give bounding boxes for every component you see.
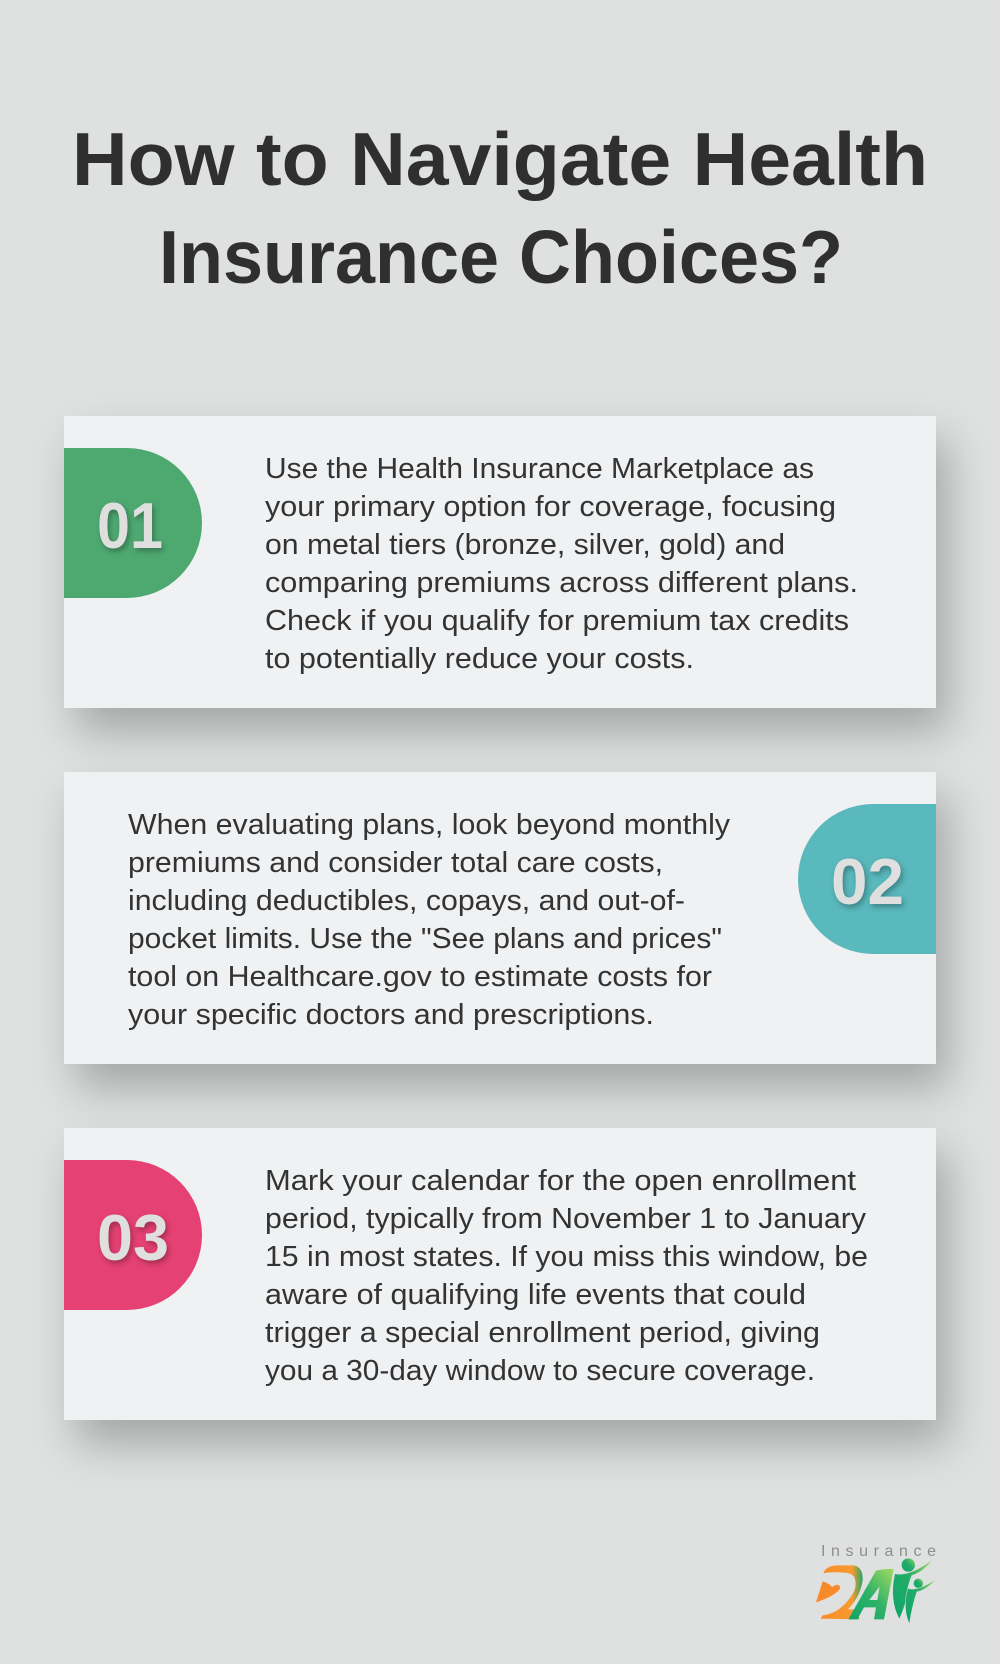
text block: marketplace advice: Use the Health Insurance Marketplace as bbox=[265, 453, 814, 485]
text block: open enrollment advice: Mark your calendar for the open enrollment bbox=[265, 1165, 856, 1197]
badge: 02: 02 bbox=[831, 845, 904, 918]
text block: marketplace advice: Check if you qualify for premium tax credits bbox=[265, 605, 849, 637]
text block: evaluating plans advice: your specific doctors and prescriptions. bbox=[128, 999, 654, 1031]
text block: evaluating plans advice bbox=[128, 809, 731, 1031]
card background 3 bbox=[64, 1128, 936, 1420]
text block: open enrollment advice: 15 in most states. If you miss this window, be bbox=[265, 1241, 868, 1273]
text block: evaluating plans advice: When evaluating plans, look beyond monthly bbox=[128, 809, 731, 841]
logo: Insurance 2Ai bbox=[816, 1543, 936, 1623]
text block: evaluating plans advice: including deductibles, copays, and out-of- bbox=[128, 885, 685, 917]
panel: step 01 bbox=[64, 448, 858, 675]
panel: step 02 bbox=[128, 804, 936, 1031]
badge: 02 bbox=[798, 804, 936, 954]
title bbox=[72, 117, 928, 299]
text block: marketplace advice: comparing premiums across different plans. bbox=[265, 567, 858, 599]
title: How to Navigate Health bbox=[72, 117, 928, 201]
text block: open enrollment advice: trigger a special enrollment period, giving bbox=[265, 1317, 820, 1349]
logo: Insurance 2Ai: Insurance bbox=[821, 1543, 936, 1560]
title: Insurance Choices? bbox=[159, 215, 843, 299]
card background 1 bbox=[64, 416, 936, 708]
badge: 01 bbox=[64, 448, 202, 598]
text block: open enrollment advice: aware of qualifying life events that could bbox=[265, 1279, 806, 1311]
text block: evaluating plans advice: pocket limits. Use the "See plans and prices" bbox=[128, 923, 722, 955]
text block: marketplace advice bbox=[265, 453, 858, 675]
text block: marketplace advice: to potentially reduce your costs. bbox=[265, 643, 694, 675]
badge: 03: 03 bbox=[97, 1201, 169, 1274]
text block: open enrollment advice: period, typically from November 1 to January bbox=[265, 1203, 867, 1235]
text block: open enrollment advice bbox=[265, 1165, 868, 1387]
badge: 01: 01 bbox=[97, 489, 163, 562]
text block: marketplace advice: your primary option for coverage, focusing bbox=[265, 491, 836, 523]
badge: 03 bbox=[64, 1160, 202, 1310]
text block: marketplace advice: on metal tiers (bronze, silver, gold) and bbox=[265, 529, 785, 561]
text block: open enrollment advice: you a 30-day window to secure coverage. bbox=[265, 1355, 815, 1387]
text block: evaluating plans advice: premiums and consider total care costs, bbox=[128, 847, 663, 879]
text block: evaluating plans advice: tool on Healthcare.gov to estimate costs for bbox=[128, 961, 713, 993]
panel: step 03 bbox=[64, 1160, 868, 1387]
card background 2 bbox=[64, 772, 936, 1064]
